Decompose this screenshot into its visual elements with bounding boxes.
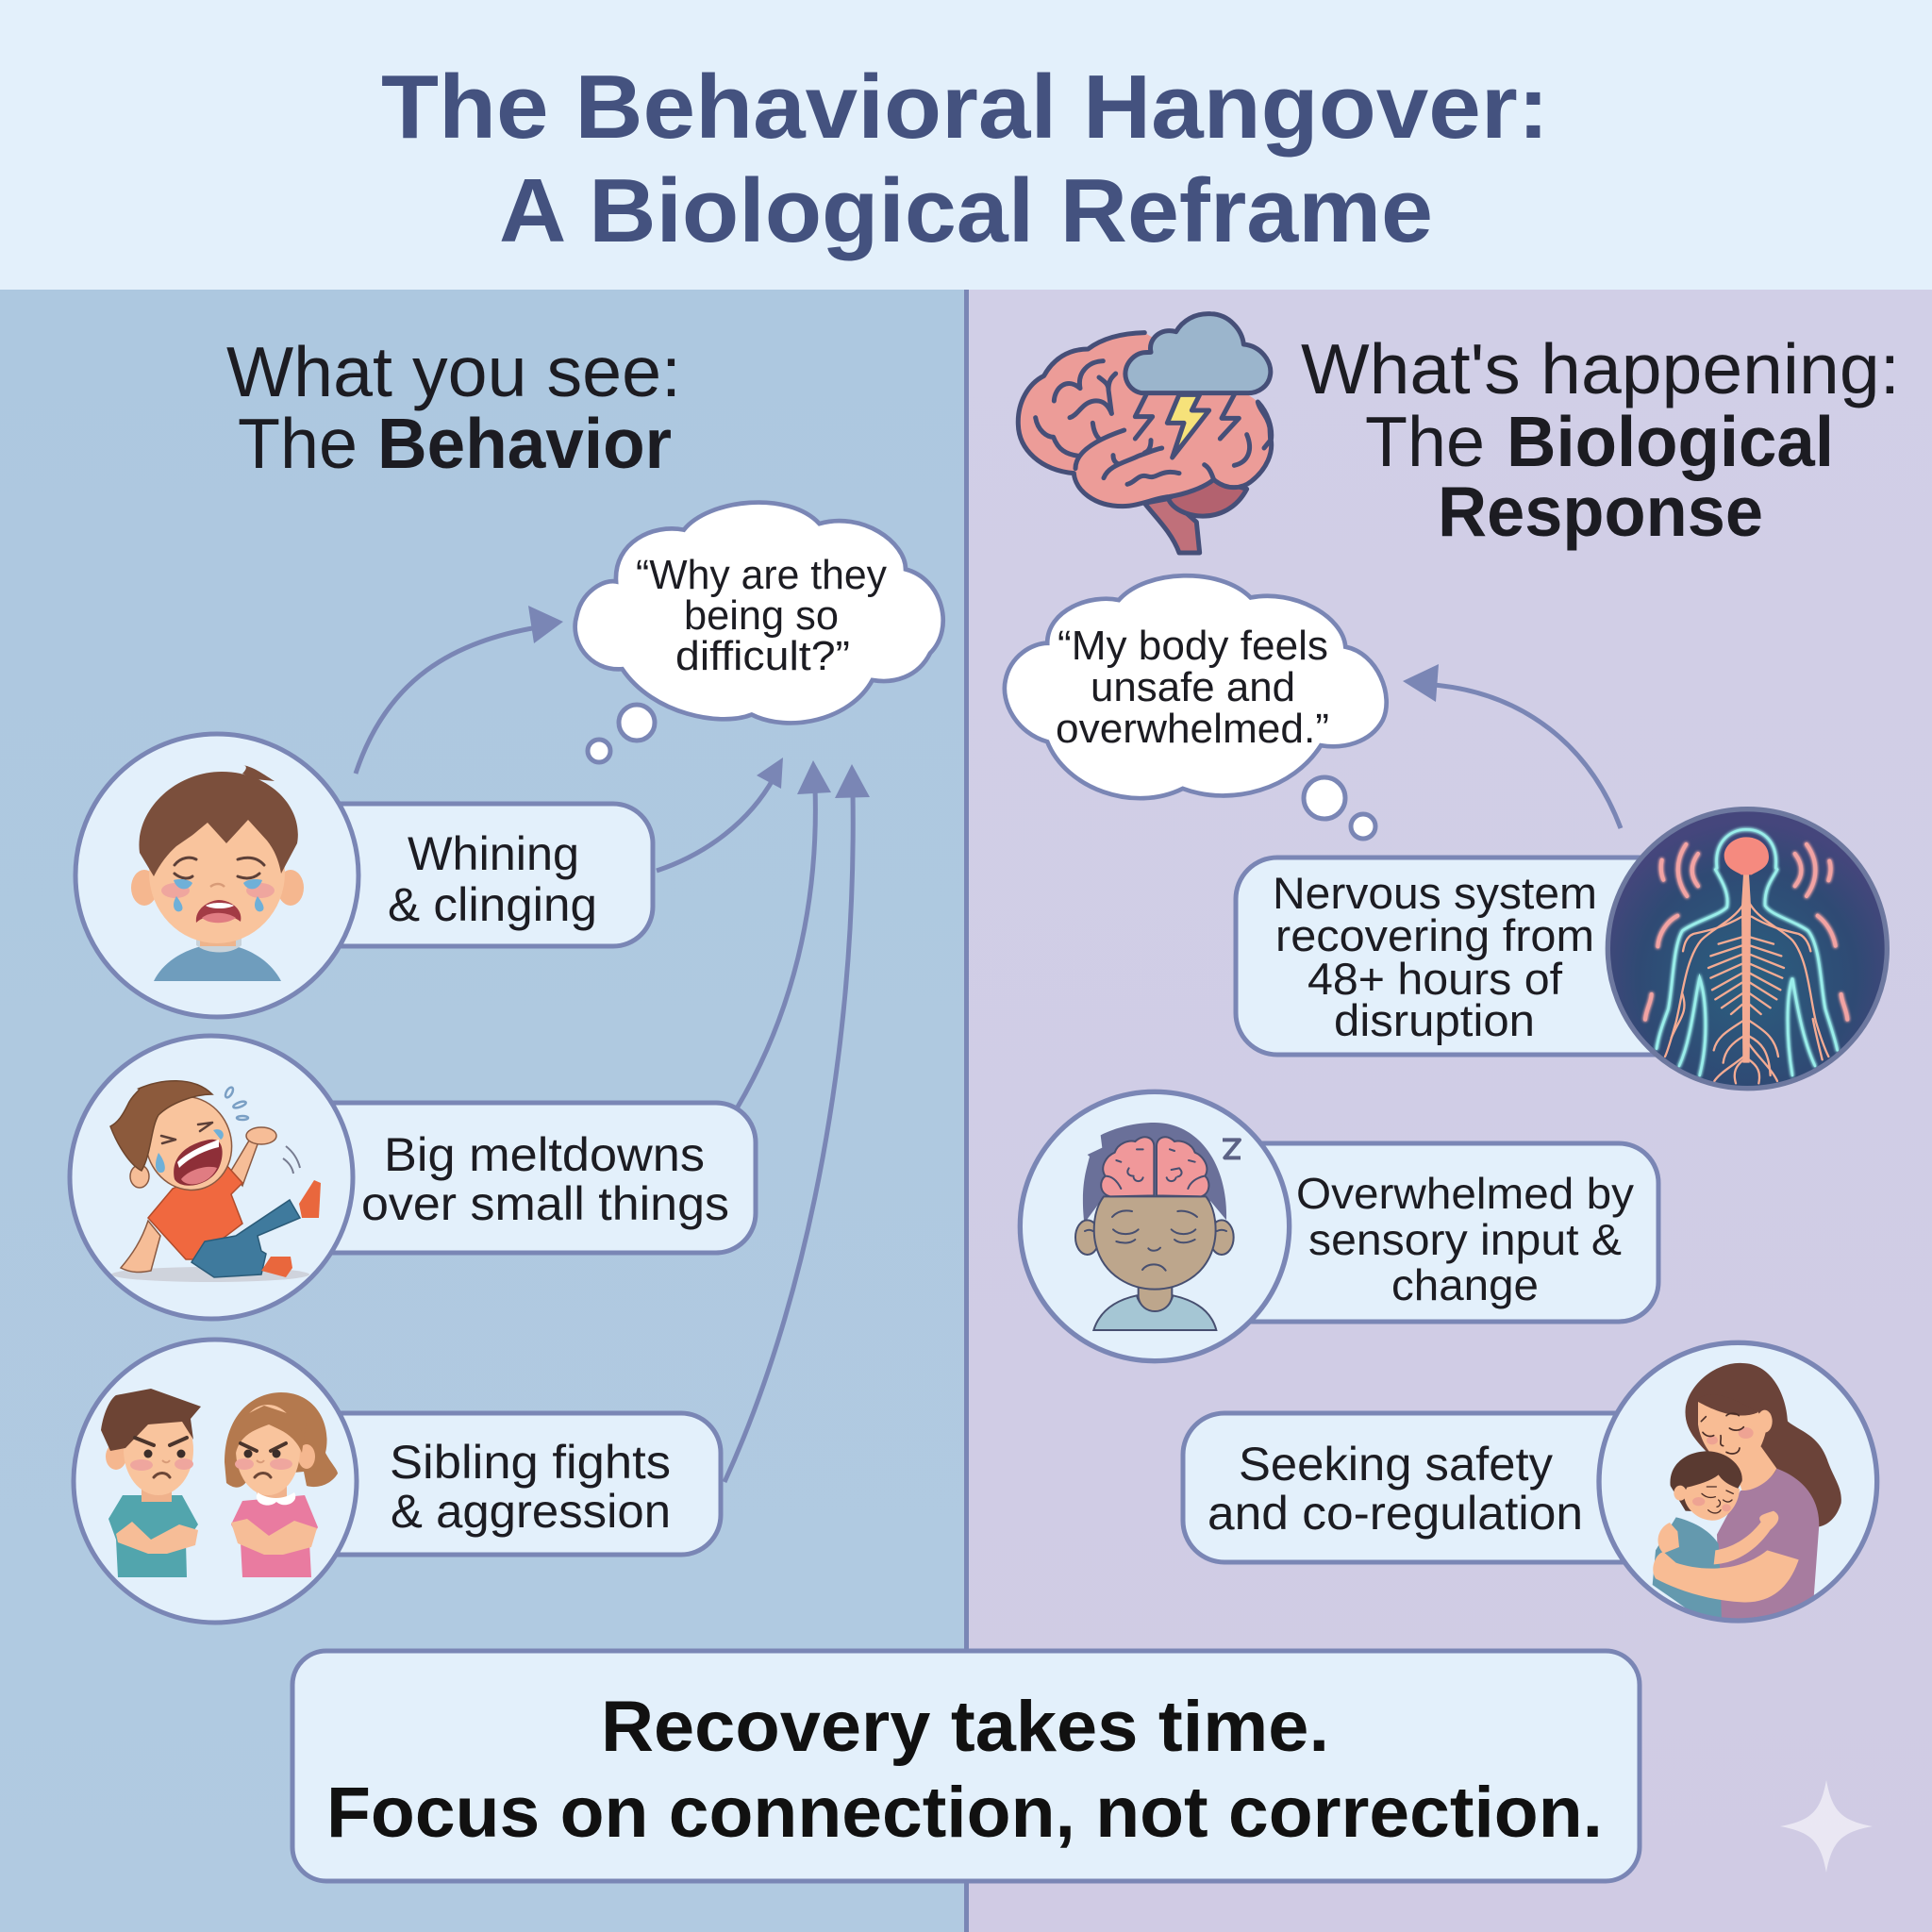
callout: seeking safety bbox=[1183, 1413, 1692, 1562]
left heading: What you see: bbox=[226, 332, 681, 411]
icon: boy having meltdown bbox=[70, 1036, 353, 1319]
callout: whining and clinging: & clinging bbox=[388, 878, 597, 931]
callout: whining and clinging: Whining bbox=[408, 827, 579, 880]
callout: big meltdowns: over small things bbox=[361, 1177, 729, 1230]
title: A Biological Reframe bbox=[499, 160, 1433, 261]
callout: seeking safety: and co-regulation bbox=[1208, 1487, 1583, 1540]
callout: overwhelmed by sensory input: change bbox=[1391, 1260, 1539, 1309]
icon: glowing nervous system bbox=[1606, 808, 1889, 1091]
takeaway box: Recovery takes time. bbox=[601, 1687, 1329, 1767]
arrow: whining to cloud bbox=[657, 758, 783, 871]
callout: sibling fights: & aggression bbox=[391, 1485, 671, 1538]
thought bubble: behavior: “Why are they bbox=[636, 552, 887, 598]
callout: overwhelmed by sensory input bbox=[1170, 1143, 1658, 1322]
arrow: meltdowns to cloud bbox=[737, 760, 831, 1108]
arrow: sibling fights to cloud bbox=[724, 764, 870, 1482]
callout: sibling fights: Sibling fights bbox=[390, 1436, 671, 1489]
right heading bbox=[1301, 329, 1900, 551]
right heading: What's happening: bbox=[1301, 329, 1900, 408]
thought bubble: body: overwhelmed.” bbox=[1056, 706, 1329, 752]
callout: seeking safety: Seeking safety bbox=[1239, 1438, 1553, 1491]
takeaway box: Focus on connection, not correction. bbox=[326, 1773, 1603, 1853]
arrow: nervous system to body cloud bbox=[1403, 664, 1621, 828]
thought bubble: body: unsafe and bbox=[1091, 664, 1295, 710]
callout: nervous system recovering: Nervous system bbox=[1273, 868, 1597, 918]
icon: angry siblings bbox=[74, 1340, 357, 1623]
background: right panel bbox=[966, 290, 1932, 1932]
left heading bbox=[226, 332, 681, 483]
right heading: Response bbox=[1438, 472, 1763, 551]
callout: sibling fights bbox=[264, 1413, 721, 1555]
icon: crying boy bbox=[75, 734, 358, 1017]
callout: nervous system recovering: 48+ hours of bbox=[1307, 954, 1563, 1004]
callout: nervous system recovering: disruption bbox=[1334, 995, 1535, 1045]
callout: whining and clinging bbox=[264, 804, 653, 946]
title bbox=[381, 57, 1549, 261]
callout: big meltdowns bbox=[264, 1103, 756, 1253]
background: left panel bbox=[0, 290, 966, 1932]
callout: big meltdowns: Big meltdowns bbox=[384, 1128, 705, 1181]
icon: tired child with brain bbox=[1020, 1091, 1290, 1361]
icon: sparkle watermark bbox=[1780, 1780, 1873, 1873]
callout: overwhelmed by sensory input: sensory input & bbox=[1308, 1215, 1622, 1264]
callout: nervous system recovering: recovering from bbox=[1275, 910, 1594, 960]
title: The Behavioral Hangover: bbox=[381, 57, 1549, 158]
header band bbox=[0, 0, 1932, 290]
takeaway box bbox=[292, 1651, 1640, 1881]
callout: overwhelmed by sensory input: Overwhelmed by bbox=[1296, 1169, 1634, 1218]
right heading: Biological bbox=[1507, 402, 1834, 481]
thought bubble: behavior bbox=[575, 503, 943, 762]
thought bubble: body: “My body feels bbox=[1058, 623, 1328, 669]
thought bubble: body bbox=[1005, 575, 1387, 839]
icon: mother hugging child bbox=[1599, 1342, 1877, 1623]
right heading: The bbox=[1365, 402, 1485, 481]
arrow: whining to question cloud top bbox=[356, 606, 563, 774]
left heading: The bbox=[238, 404, 358, 483]
thought bubble: behavior: difficult?” bbox=[675, 633, 850, 679]
left heading: Behavior bbox=[377, 404, 672, 483]
callout: nervous system recovering bbox=[1236, 858, 1698, 1055]
icon: brain with storm cloud bbox=[1018, 314, 1272, 553]
thought bubble: behavior: being so bbox=[684, 592, 839, 639]
